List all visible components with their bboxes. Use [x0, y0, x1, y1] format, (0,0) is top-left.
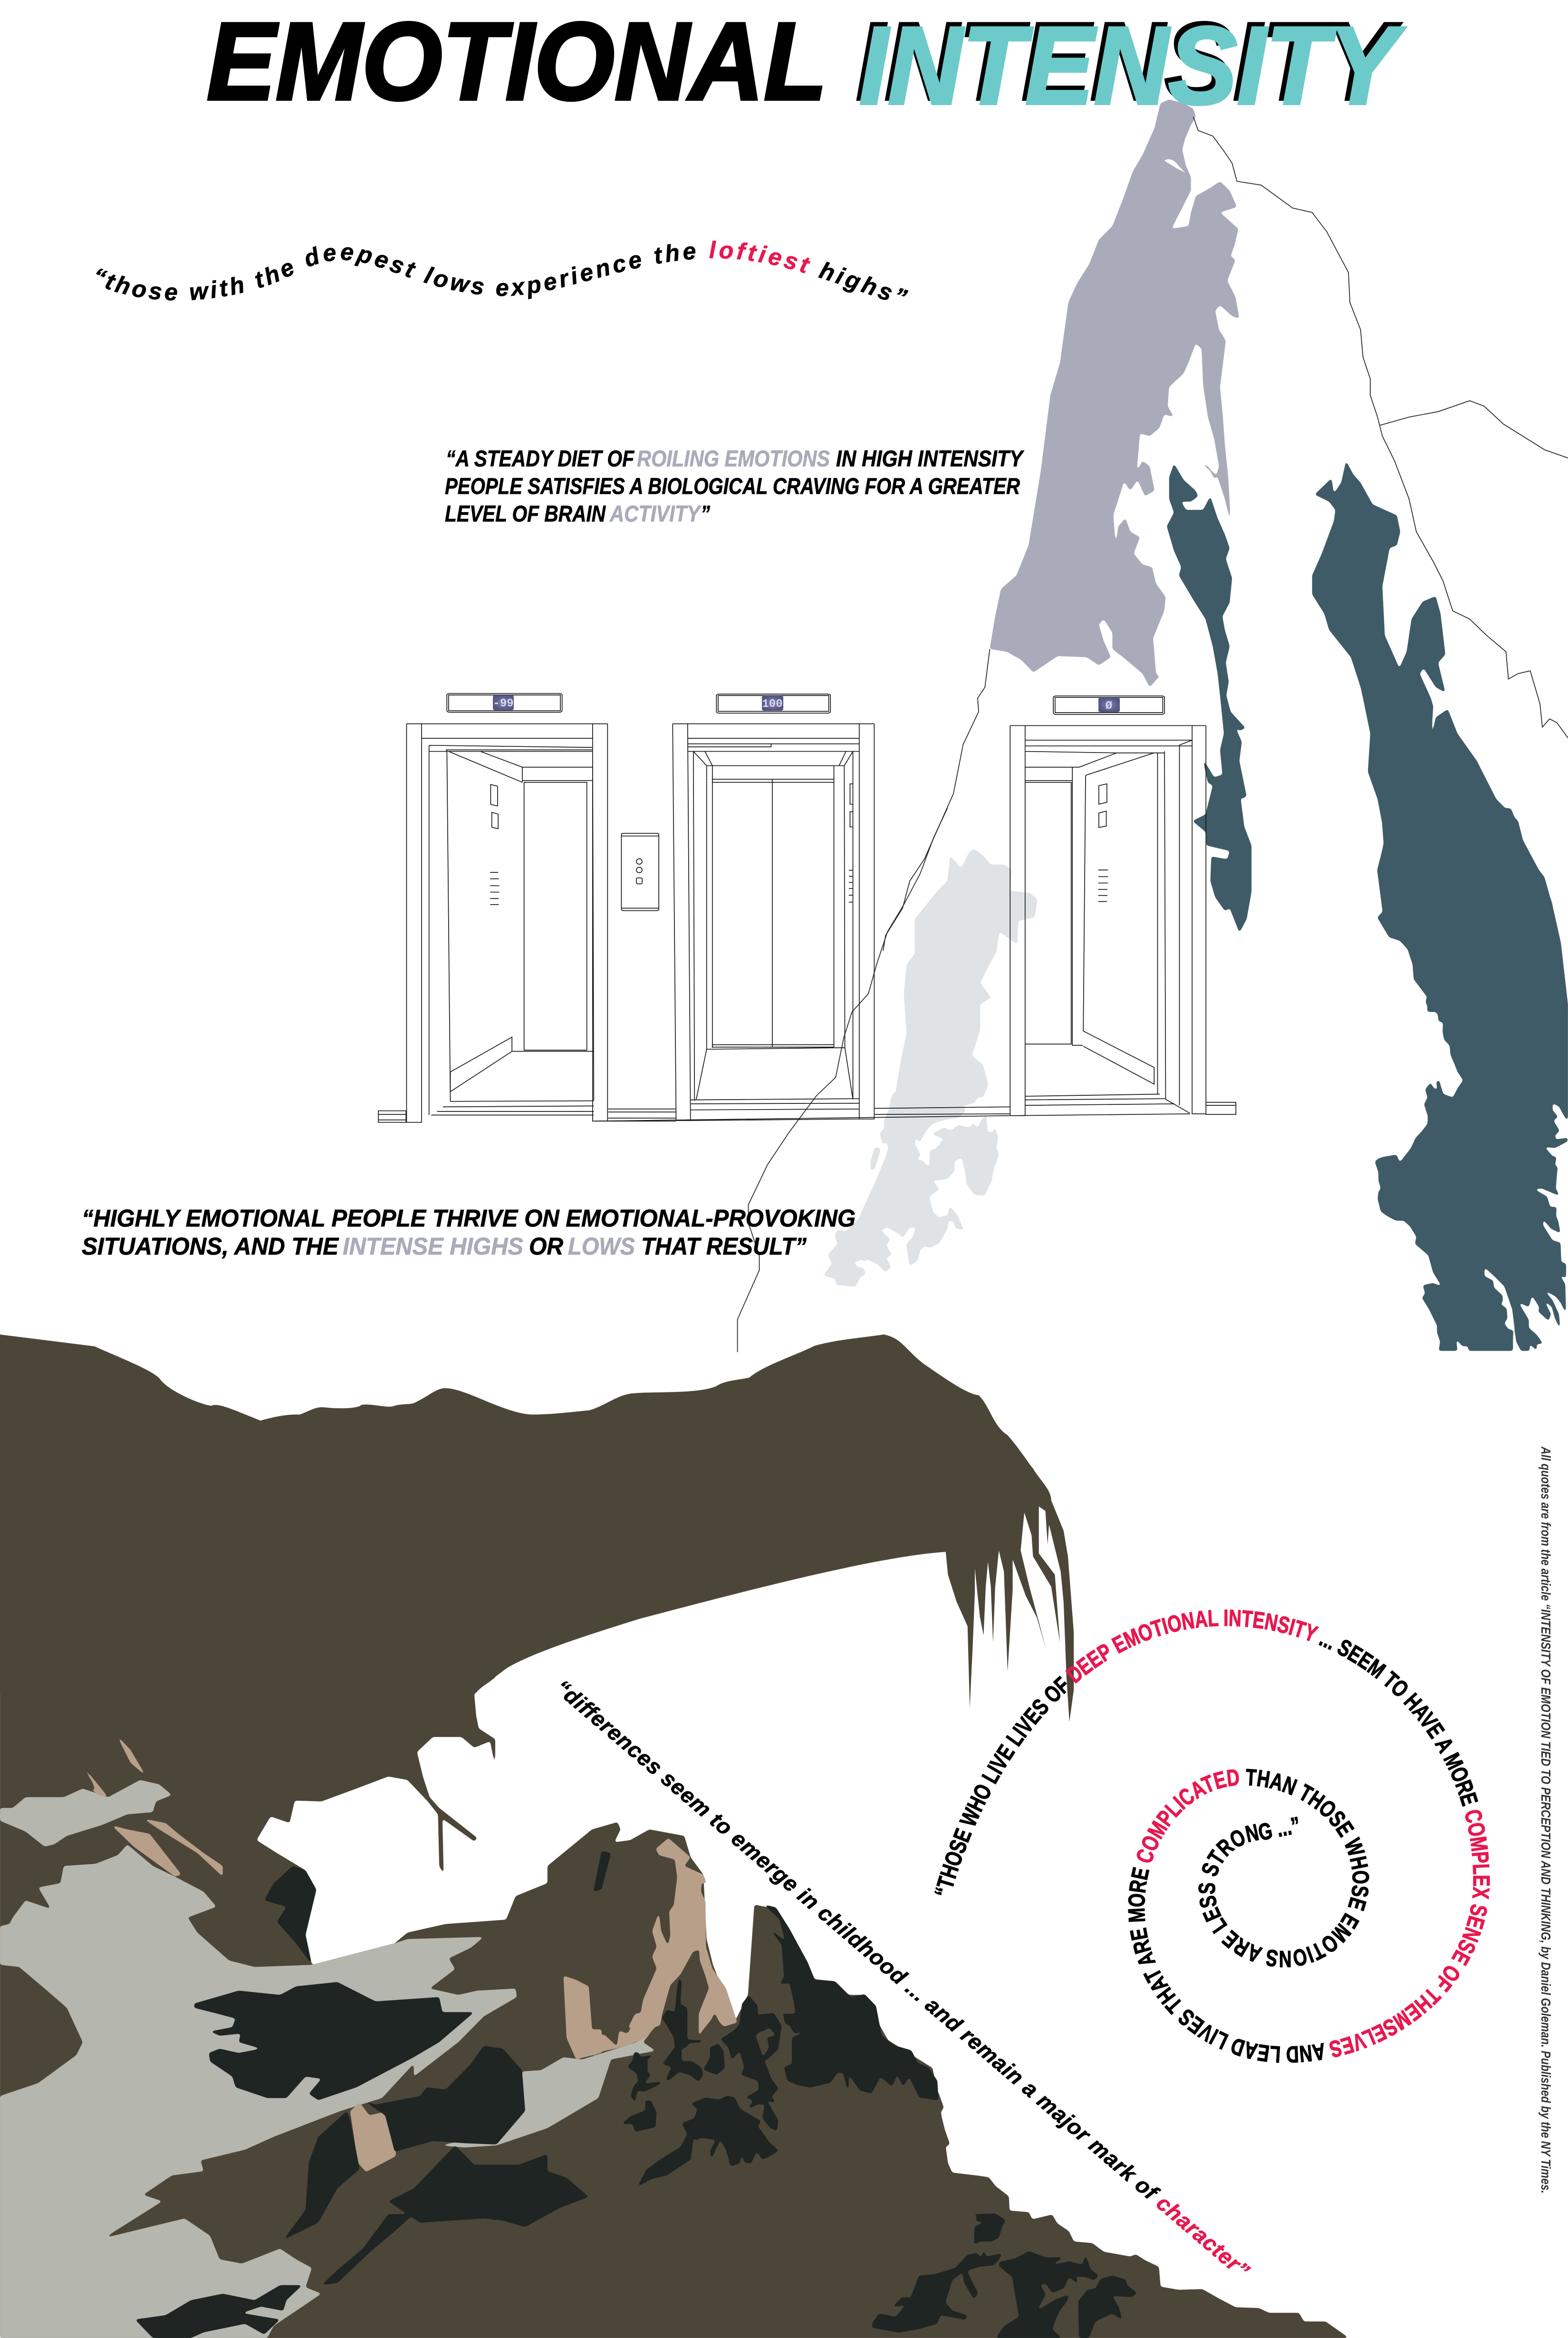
upper mountain: small dark lake [1167, 464, 1251, 933]
call button panel [608, 833, 676, 1121]
lower mountain: main brown overhang [0, 1334, 1074, 1722]
quote: steady diet: ROILING EMOTIONS [637, 446, 830, 472]
right elevator [595, 696, 1236, 1121]
quote: thrive on emotion [82, 1205, 856, 1260]
brown cliffs [0, 1664, 1349, 2338]
upper mountain: lilac snowfield [990, 99, 1240, 687]
display: -99: -99 [493, 697, 514, 710]
quote: thrive on emotion: INTENSE HIGHS [343, 1233, 523, 1260]
middle elevator [673, 694, 874, 1121]
mountain contour lines [738, 117, 1568, 1352]
quote: steady diet: “A STEADY DIET OF [446, 446, 635, 472]
quote: thrive on emotion: LOWS [568, 1233, 635, 1260]
tan rock faces [79, 1735, 737, 2172]
upper mountain: pale grey shadow island [823, 849, 1038, 1287]
quote: steady diet [445, 446, 1025, 527]
elevators line art [378, 694, 1236, 1122]
quote: thrive on emotion: “HIGHLY EMOTIONAL PEOPLE THRIVE ON EMOTIONAL-PROVOKING [82, 1205, 856, 1232]
title [207, 0, 1405, 127]
source note: All quotes are from the article “INTENSITY OF EMOTION TIED TO PERCEPTION AND THINKING, by Daniel Goleman. Published by the NY Times. [1539, 1446, 1553, 2193]
quote: steady diet: LEVEL OF BRAIN [445, 502, 606, 527]
display: 0: Ø [1106, 700, 1112, 713]
diagonal quote: differences: “differences seem to emerge in childhood ... and remain a major mark of character” [550, 1675, 1254, 2283]
quote: thrive on emotion: THAT RESULT” [641, 1233, 807, 1260]
quote: steady diet: PEOPLE SATISFIES A BIOLOGICAL CRAVING FOR A GREATER [445, 474, 1020, 499]
quote: thrive on emotion: OR [529, 1233, 563, 1260]
quote: steady diet: ACTIVITY [609, 502, 702, 527]
pale grey valley [0, 1780, 655, 2338]
quote: steady diet: IN HIGH INTENSITY [836, 446, 1025, 472]
quote: steady diet: ” [701, 502, 710, 527]
wavy quote: deepest lows: “those with the deepest lows experience the loftiest highs” [88, 237, 913, 312]
quote: thrive on emotion: SITUATIONS, AND THE [82, 1233, 339, 1260]
title word: INTENSITY: INTENSITY [859, 4, 1405, 127]
elevator floor displays [493, 695, 1120, 713]
dark forest patches [135, 1851, 1137, 2338]
title word shadow: INTENSITY: INTENSITY [856, 0, 1401, 123]
upper mountain: large dark lake [1312, 461, 1568, 1351]
title word: EMOTIONAL: EMOTIONAL [207, 0, 827, 123]
display: 100: 100 [762, 698, 783, 711]
lower mountain: cliffs, cave and right slope [0, 1664, 1349, 2338]
left elevator [378, 694, 607, 1122]
spiral quote: “THOSE WHO LIVE LIVES OF DEEP EMOTIONAL INTENSITY ... SEEM TO HAVE A MORE COMPLEX SENSE OF THEMSELVES AND LEAD LIVES THAT ARE MORE COMPLICATED THAN THOSE WHOSE EMOTIONS ARE LESS STRONG ...” [930, 1605, 1494, 2067]
display: 0 [1098, 697, 1120, 713]
